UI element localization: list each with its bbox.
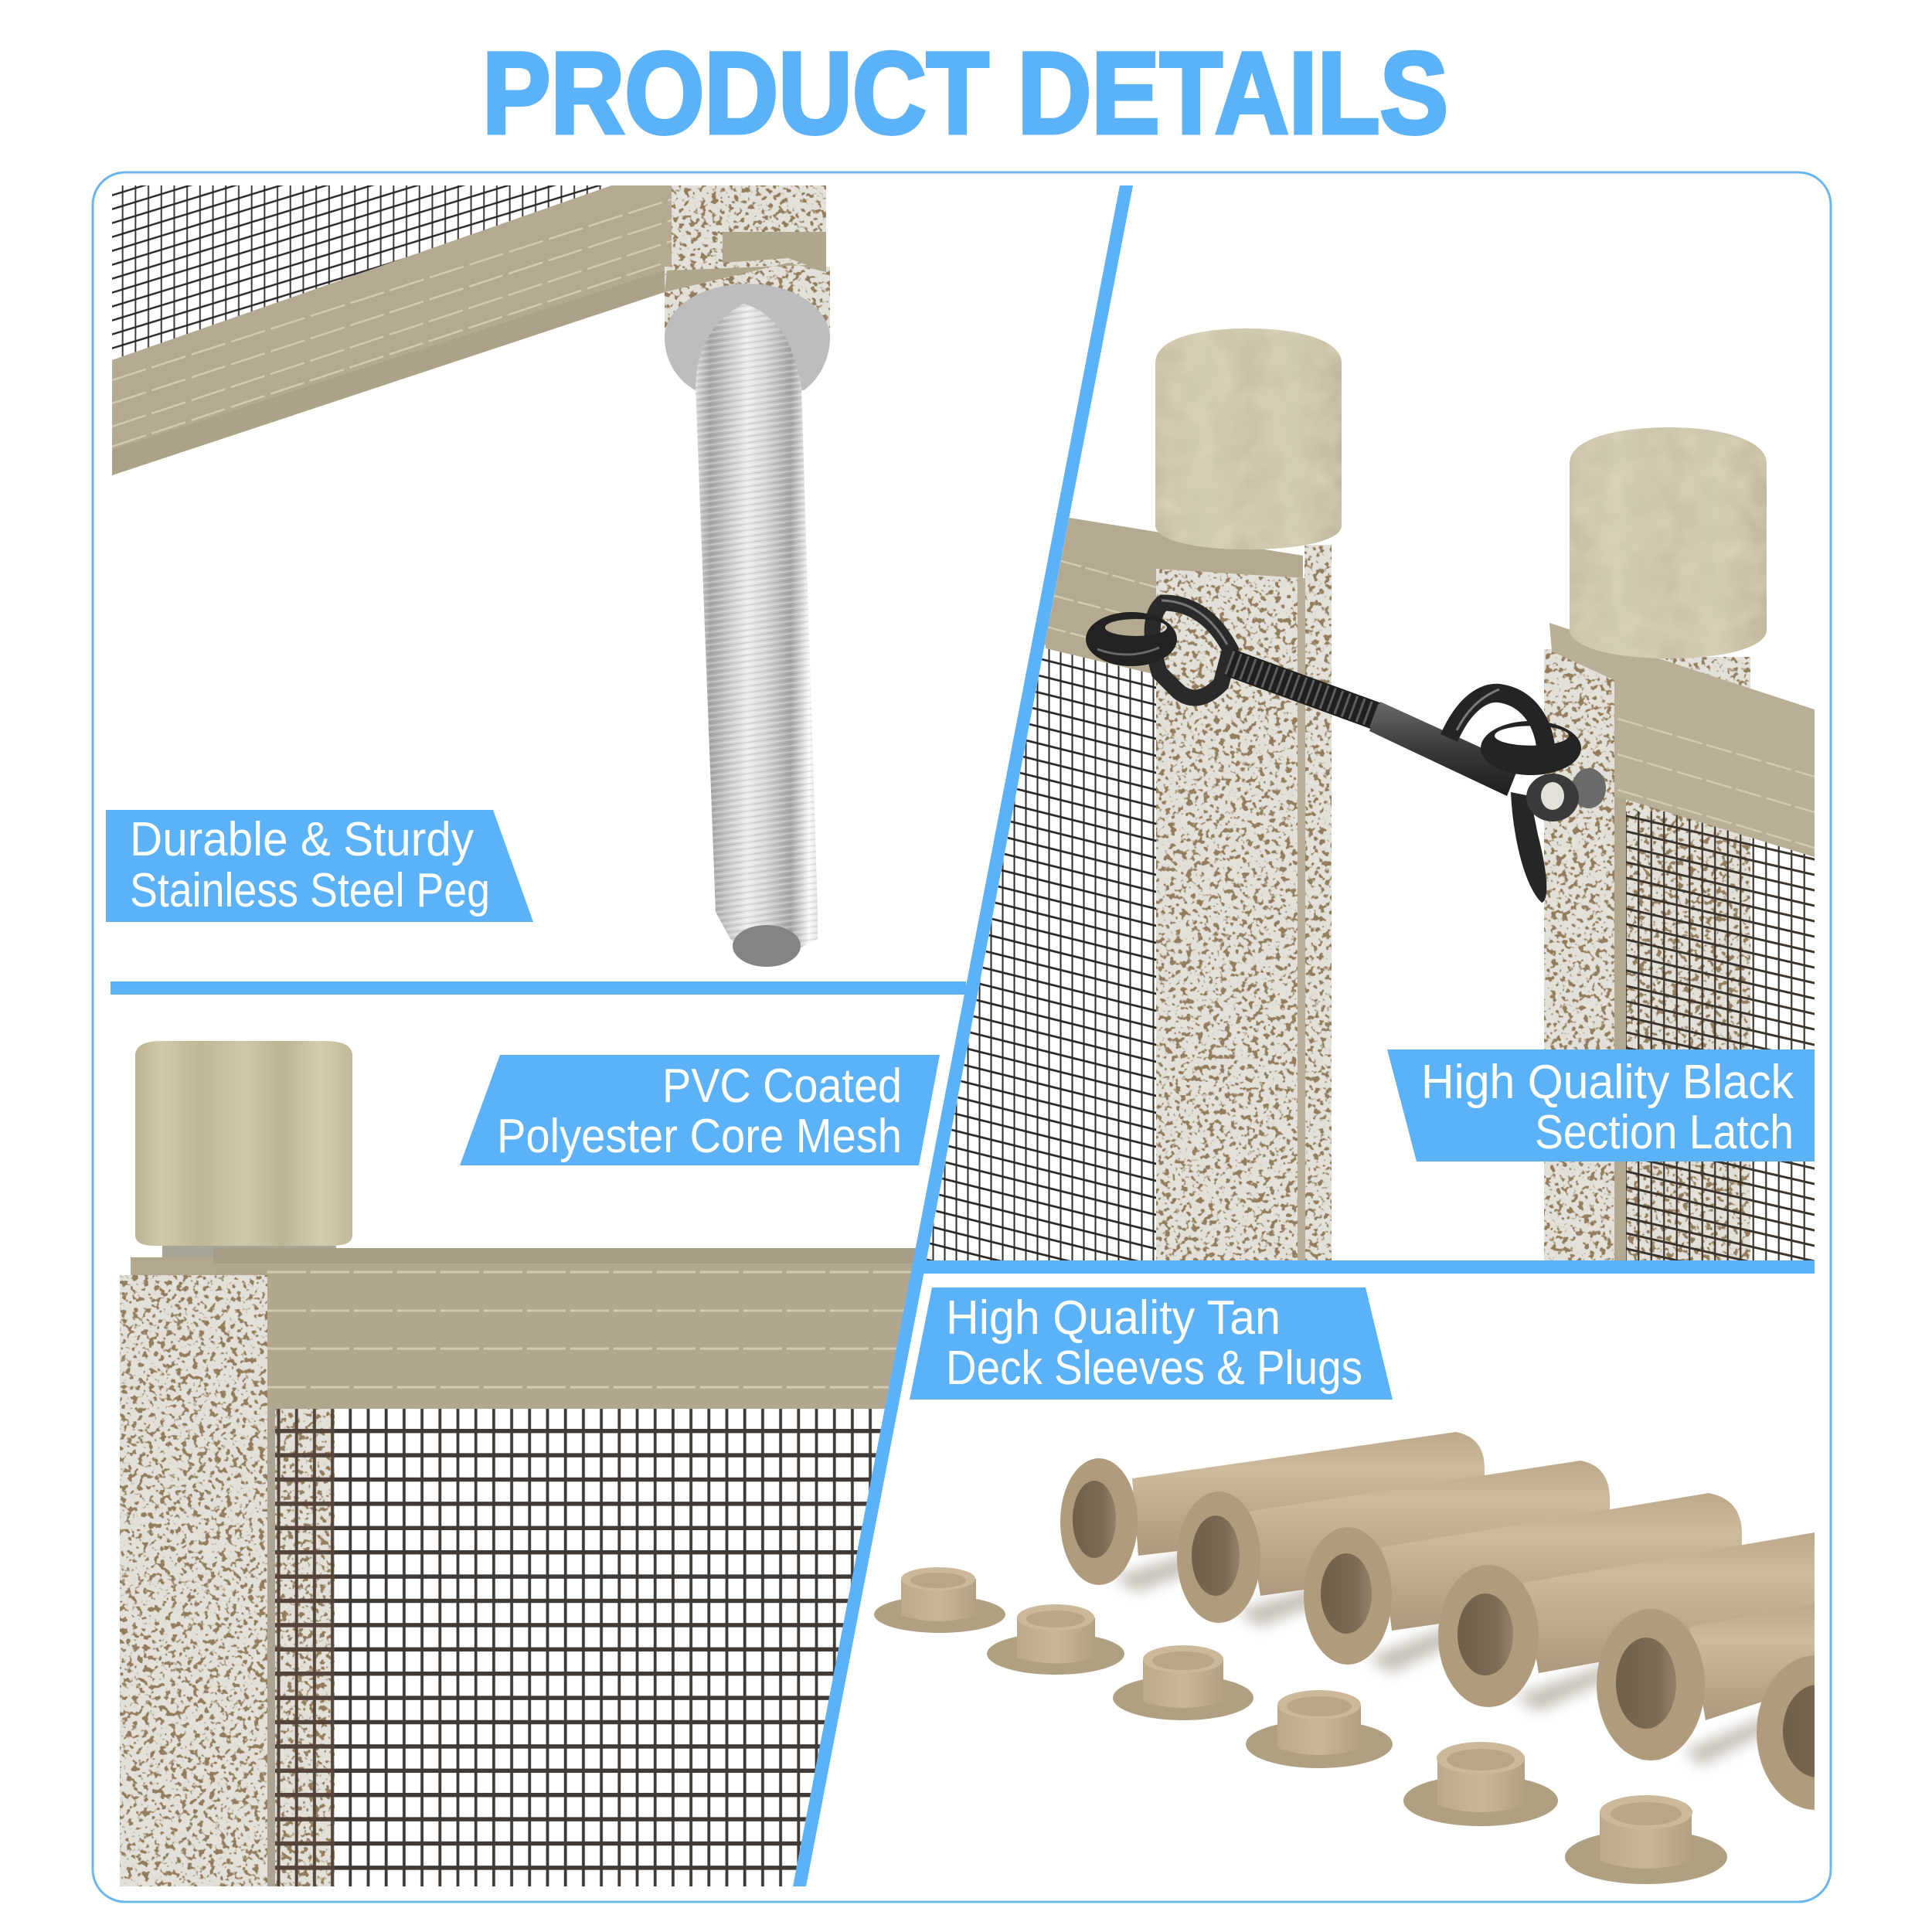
post A body [1156, 533, 1332, 1260]
upper post section [672, 185, 826, 267]
plug 3 [1113, 1645, 1253, 1720]
post B back section [1614, 657, 1750, 1260]
divider: diagonal [793, 185, 1133, 1886]
label: durable and sturdy: Durable & Sturdy [130, 813, 474, 866]
sleeve 5 [1597, 1604, 1815, 1760]
mesh fabric [335, 1409, 930, 1886]
right mesh fabric [1626, 811, 1815, 1260]
sleeve 4 [1438, 1532, 1815, 1707]
label: deck sleeves and plugs: Deck Sleeves & Plugs [946, 1342, 1362, 1395]
sleeve 3 [1304, 1493, 1742, 1665]
sleeve 2 [1177, 1461, 1610, 1623]
label: black section latch: High Quality Black [1421, 1056, 1794, 1109]
label: durable and sturdy: Stainless Steel Peg [130, 864, 490, 917]
webbing band [131, 1248, 924, 1409]
tan side strip B [1614, 796, 1626, 1260]
label: pvc coated [460, 1055, 940, 1165]
post B body [1544, 649, 1614, 1260]
label: pvc coated: PVC Coated [662, 1060, 902, 1113]
left ring [1086, 612, 1177, 666]
panel: stainless steel peg [112, 185, 830, 967]
screw eyelets [1572, 768, 1606, 808]
left webbing band [1036, 518, 1303, 675]
mesh fabric top left [112, 185, 614, 360]
sleeve 1 [1060, 1432, 1485, 1585]
label: durable and sturdy [106, 810, 533, 922]
panel: deck sleeves and plugs [874, 1432, 1876, 1884]
black latch [1086, 600, 1606, 903]
sleeve collar [665, 263, 830, 392]
post cap [135, 1041, 352, 1258]
panel: section latch [920, 328, 1815, 1260]
steel peg [696, 304, 818, 967]
screw eye [1152, 603, 1230, 698]
divider: horizontal right [923, 1260, 1815, 1274]
label: black section latch [1387, 1049, 1815, 1162]
plug 2 [987, 1604, 1124, 1675]
hook tail [1511, 792, 1546, 903]
tan side strip [267, 1409, 275, 1886]
label: deck sleeves and plugs [910, 1287, 1393, 1400]
mesh over post [275, 1409, 335, 1886]
sleeve shadows [1113, 1549, 1785, 1766]
label: black section latch: Section Latch [1535, 1106, 1794, 1159]
plug 4 [1246, 1690, 1393, 1768]
tan webbing band [112, 185, 724, 475]
right webbing band [1549, 623, 1815, 857]
speckled post [120, 1275, 267, 1886]
plug 1 [874, 1567, 1005, 1633]
plug 6 [1565, 1795, 1727, 1884]
divider: horizontal left [111, 981, 966, 995]
spring [1229, 662, 1377, 716]
panel: pvc coated mesh [120, 1041, 930, 1886]
left mesh fabric [920, 618, 1156, 1260]
post behind mesh [275, 1409, 335, 1886]
label: pvc coated: Polyester Core Mesh [497, 1110, 902, 1163]
title: PRODUCT DETAILS [482, 28, 1448, 158]
post B cap [1570, 427, 1767, 658]
post A cap [1155, 328, 1342, 549]
right ring [1481, 721, 1581, 775]
rod [1369, 702, 1519, 796]
plug 5 [1403, 1742, 1558, 1826]
label: deck sleeves and plugs: High Quality Tan [946, 1291, 1281, 1345]
sleeve 6 [1757, 1655, 1876, 1810]
hook arch [1449, 693, 1546, 746]
